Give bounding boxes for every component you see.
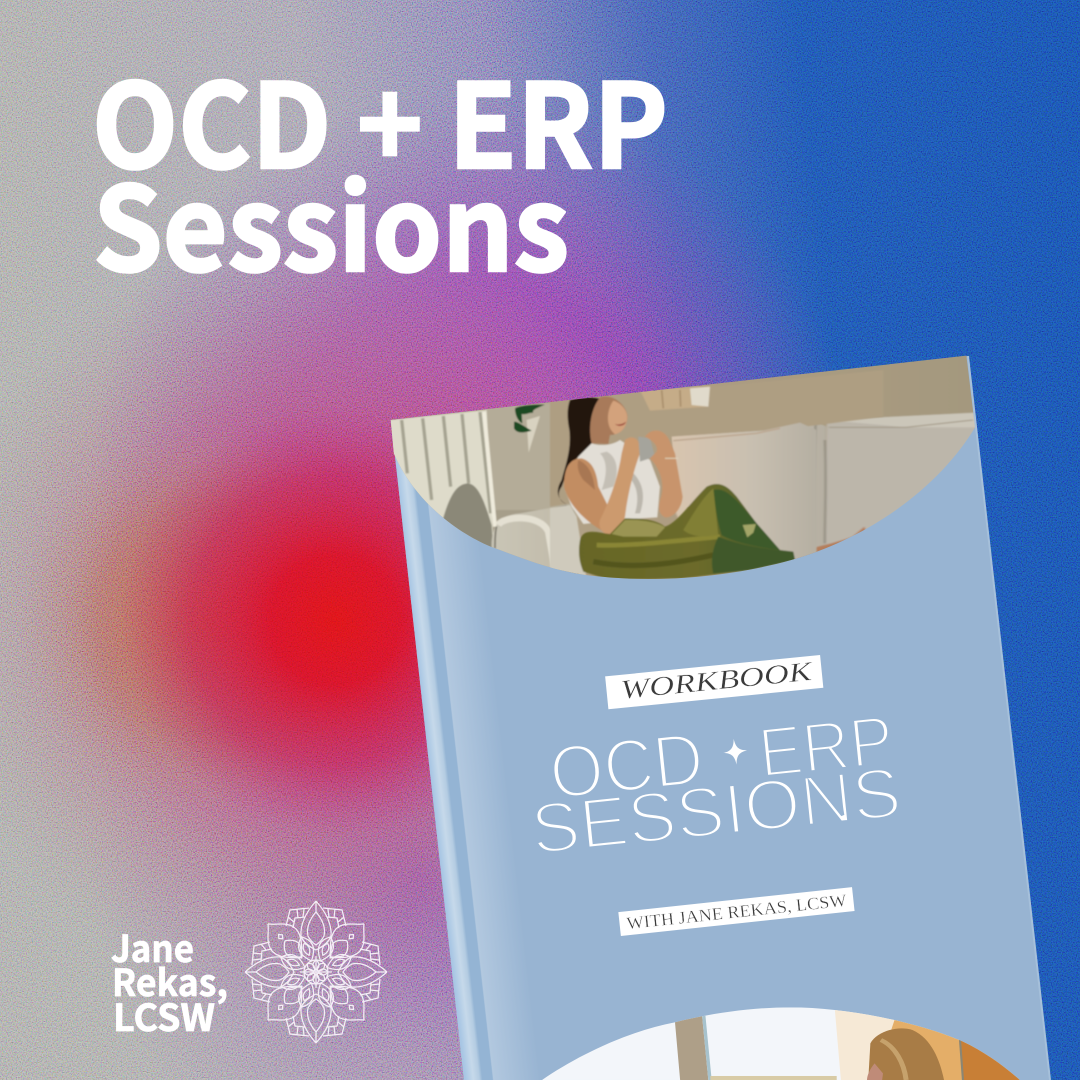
book title: ERP (755, 701, 897, 792)
author name (111, 919, 228, 1042)
workbook label (605, 655, 823, 709)
top photo: woman on sofa (380, 350, 997, 583)
book title (522, 697, 905, 870)
sofa and wall (380, 350, 997, 583)
icon: sparkle star (722, 737, 748, 766)
book title: SESSIONS (528, 753, 905, 870)
author name: LCSW (113, 988, 215, 1042)
book cover (391, 356, 1050, 1080)
title: OCD + ERP (92, 32, 668, 202)
book title: OCD (546, 716, 707, 815)
workbook label: WORKBOOK (619, 656, 816, 705)
workbook mockup (380, 350, 1050, 1080)
bottom photo: window and blonde woman (542, 1008, 1020, 1080)
cover title block (515, 645, 914, 946)
author name: Jane (111, 919, 194, 973)
author name: Rekas, (112, 953, 228, 1007)
title (92, 32, 668, 305)
woman (550, 370, 883, 580)
icon: mandala logo (245, 901, 387, 1043)
window blinds, plant and sofa arm (390, 403, 580, 580)
title: Sessions (93, 135, 569, 305)
author label: WITH JANE REKAS, LCSW (626, 890, 848, 933)
